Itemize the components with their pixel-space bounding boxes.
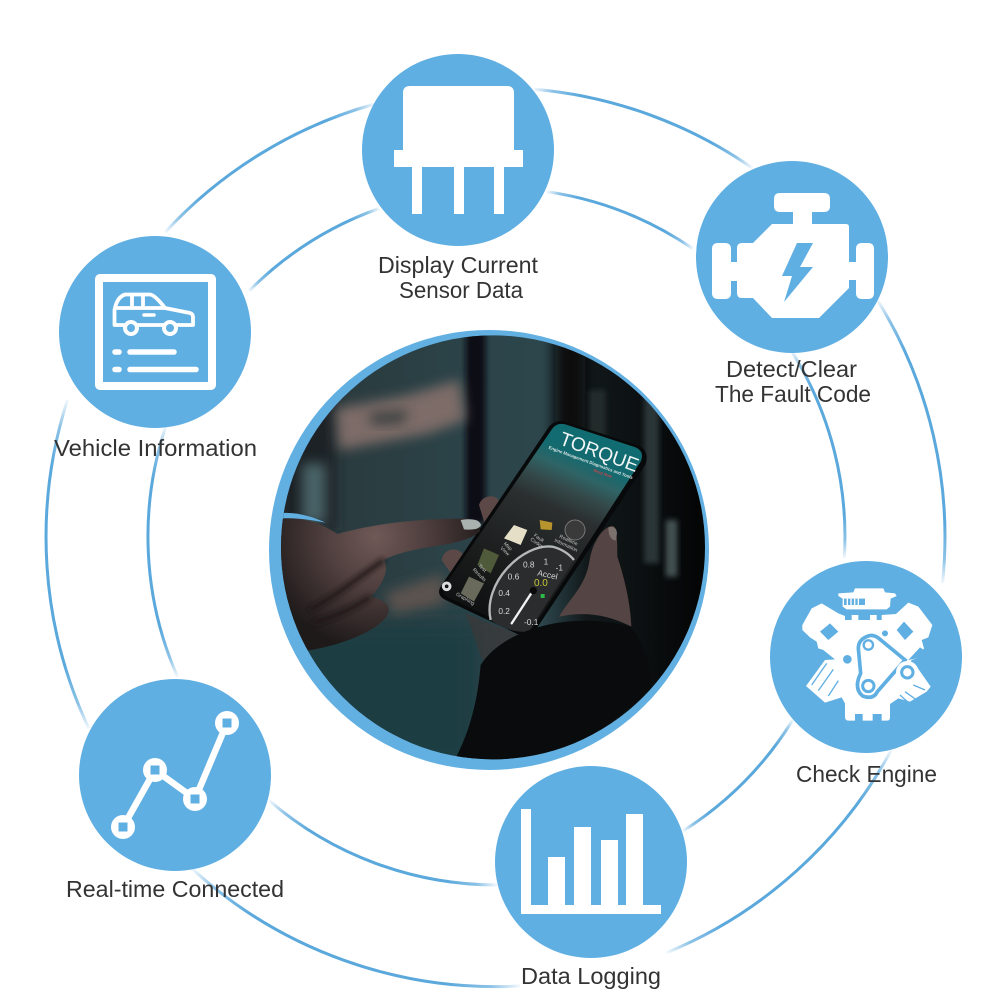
phone: [439, 421, 647, 635]
label: Check Engine: [796, 761, 937, 787]
label: Display Current: [378, 252, 539, 278]
phone: Map: [502, 541, 513, 552]
icon: line chart: [111, 711, 239, 839]
app icons: [504, 525, 527, 545]
node: real-time connected: [66, 679, 284, 902]
node: detect/clear fault code: [696, 161, 888, 407]
label: Detect/Clear: [726, 356, 857, 382]
node: detect/clear fault code: The Fault Code: [715, 381, 871, 407]
icon: bar chart: [521, 809, 661, 914]
icon: car document: [99, 278, 212, 386]
blurred background: [279, 323, 677, 770]
phone: 0.0: [534, 578, 548, 589]
label: Real-time Connected: [66, 876, 284, 902]
phone: Graphing: [455, 592, 476, 607]
node: display current sensor data: Sensor Data: [399, 277, 523, 303]
phone: Fault: [532, 533, 545, 544]
node: display current sensor data: [362, 54, 554, 303]
central photo: phone in hands: [269, 323, 709, 770]
holding hand thumb and palm: [559, 526, 631, 627]
phone: 0.4: [498, 588, 510, 598]
inner ring arcs: [148, 192, 845, 885]
phone: View: [499, 546, 511, 558]
node: vehicle information: [54, 236, 257, 461]
label: Vehicle Information: [54, 435, 257, 461]
acceleration gauge: [490, 546, 574, 632]
holding hand behind phone: [442, 496, 500, 580]
phone: 0.8: [523, 559, 535, 569]
node: data logging: [495, 766, 687, 989]
phone: Test: [477, 563, 488, 574]
phone: Accel: [537, 568, 559, 582]
phone: 1: [544, 557, 549, 567]
phone: Results: [471, 567, 487, 584]
pointing hand: [277, 518, 480, 651]
node: check engine: [770, 561, 962, 787]
icon: engine warning: [712, 193, 874, 318]
settings gear: [443, 583, 450, 590]
sleeve: [456, 620, 623, 760]
phone: -0.1: [524, 617, 539, 627]
phone: Information: [553, 538, 578, 554]
phone: Shop Now: [593, 468, 614, 479]
phone: 0.6: [508, 571, 520, 581]
phone: Engine Management Diagnostics and Tools: [548, 445, 634, 480]
app title: TORQUE: [557, 429, 641, 477]
phone: Realtime: [558, 534, 579, 548]
phone: 0.2: [498, 606, 510, 616]
icon: sensor chip: [394, 86, 523, 214]
icon: motor: [802, 588, 932, 721]
label: Data Logging: [521, 963, 661, 989]
phone: Codes: [529, 537, 545, 550]
phone: -1: [556, 563, 563, 573]
